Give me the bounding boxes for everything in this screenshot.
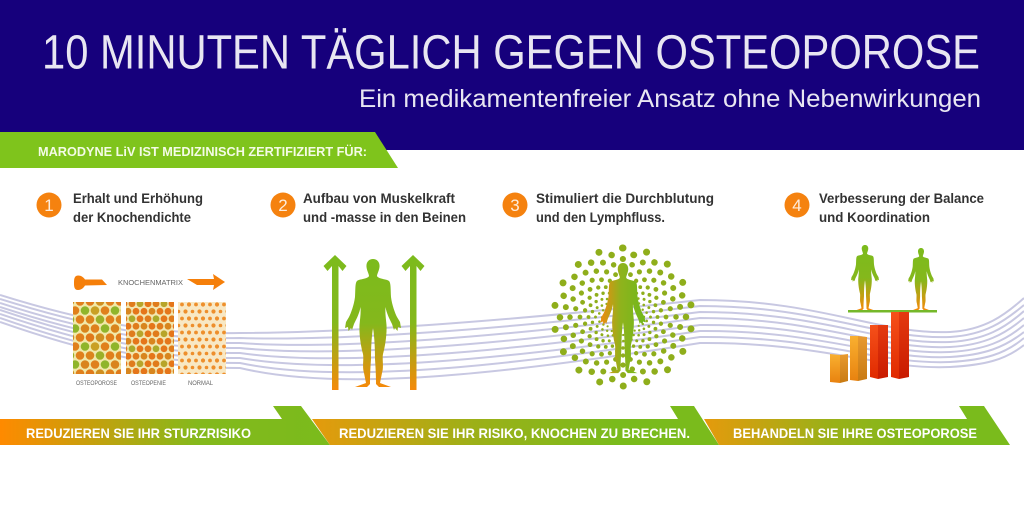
background wave lines	[0, 295, 1024, 379]
figure right	[908, 248, 934, 310]
benefit 4: 4	[792, 196, 802, 215]
benefit 1	[36, 191, 203, 225]
human figure	[601, 263, 645, 373]
benefit 2: 2	[278, 196, 288, 215]
header band	[0, 0, 1024, 150]
bottom ribbon 3	[704, 406, 1010, 445]
bar 1	[830, 354, 848, 383]
bottom ribbon 1: REDUZIEREN SIE IHR STURZRISIKO	[26, 425, 251, 441]
label: normal: NORMAL	[188, 381, 214, 387]
subtitle: Ein medikamentenfreier Ansatz ohne Nebenwirkungen	[359, 85, 981, 113]
benefit 2: und -masse in den Beinen	[303, 210, 466, 225]
benefit 3	[502, 191, 714, 225]
benefit 1: der Knochendichte	[73, 210, 191, 225]
benefit 4	[784, 191, 984, 225]
icon: arrow right	[187, 274, 225, 290]
label: osteopenie: OSTEOPENIE	[131, 381, 166, 387]
bottom ribbon 3: BEHANDELN SIE IHRE OSTEOPOROSE	[733, 425, 977, 441]
benefit 4: Verbesserung der Balance	[819, 191, 984, 206]
bottom ribbon 1	[0, 406, 330, 445]
tile: osteopenie	[126, 302, 174, 374]
icon: bone arrow left	[74, 276, 107, 290]
bar 4	[891, 312, 909, 379]
benefit 3: Stimuliert die Durchblutung	[536, 191, 714, 206]
bottom ribbon 2	[312, 406, 719, 445]
balance plank	[848, 310, 937, 312]
benefit 4: und Koordination	[819, 210, 930, 225]
bone matrix diagram	[73, 274, 226, 387]
muscle figure with arrows	[324, 255, 424, 390]
benefit 3: 3	[510, 196, 520, 215]
tile: osteoporose	[73, 302, 121, 374]
benefit 1: Erhalt und Erhöhung	[73, 191, 203, 206]
green certification banner	[0, 132, 398, 168]
bar 3	[870, 325, 888, 379]
balance figures and bars	[830, 245, 937, 383]
arrow right	[402, 255, 424, 390]
tile: normal	[178, 302, 226, 374]
benefit 1: 1	[44, 196, 54, 215]
bottom ribbon 2: REDUZIEREN SIE IHR RISIKO, KNOCHEN ZU BRECHEN.	[339, 425, 690, 441]
figure left	[851, 245, 879, 310]
human figure	[345, 259, 401, 387]
benefit 2: Aufbau von Muskelkraft	[303, 191, 455, 206]
arrow left	[324, 255, 346, 390]
benefit 2	[270, 191, 466, 225]
label: knochenmatrix: KNOCHENMATRIX	[118, 280, 183, 287]
green certification banner: MARODYNE LiV IST MEDIZINISCH ZERTIFIZIERT FÜR:	[38, 144, 367, 159]
circulation dot burst	[550, 244, 696, 390]
benefit 3: und den Lymphfluss.	[536, 210, 665, 225]
label: osteoporose: OSTEOPOROSE	[76, 381, 117, 387]
bar 2	[850, 336, 867, 381]
